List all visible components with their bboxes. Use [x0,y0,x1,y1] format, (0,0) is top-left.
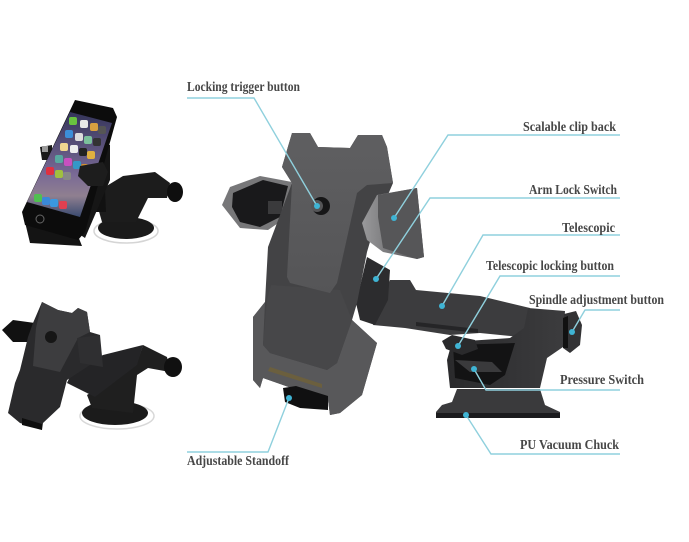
callout: Scalable clip back [391,119,620,221]
main product: telescopic arm and base [373,280,582,418]
rear holder [25,143,110,246]
locking button [442,335,478,355]
inner panel [263,285,352,370]
front clip [78,162,108,186]
silhouette [253,133,393,415]
cavity and pressure switch [453,343,515,385]
callout: Spindle adjustment button [529,292,664,335]
callout: Scalable clip back: Scalable clip back [523,119,616,134]
adjustable standoff [283,386,328,410]
screen [27,112,112,217]
callout: PU Vacuum Chuck: PU Vacuum Chuck [520,437,619,452]
callout: Adjustable Standoff [187,395,292,468]
main product: holder body [253,133,393,415]
logo mark [268,367,322,388]
callout: Telescopic [439,220,620,309]
callout: Locking trigger button [187,79,320,209]
mount base [85,172,183,243]
callout: PU Vacuum Chuck [463,412,620,454]
lower shell [253,302,377,415]
callout: Locking trigger button: Locking trigger button [187,79,300,94]
main product: left clip [222,176,292,230]
suction base [436,389,560,418]
base body [447,308,565,388]
callout: Telescopic: Telescopic [562,220,615,235]
callout: Telescopic locking button: Telescopic locking button [486,258,614,273]
product photo: phone in mount [22,100,183,246]
callout: Pressure Switch: Pressure Switch [560,372,644,387]
arm [373,280,530,338]
callout: Arm Lock Switch: Arm Lock Switch [529,182,617,197]
callout: Adjustable Standoff: Adjustable Standoff [187,453,289,468]
app icons [34,117,106,209]
trigger button [312,197,330,215]
callout: Spindle adjustment button: Spindle adjustment button [529,292,664,307]
front plate [282,133,393,293]
callout: Telescopic locking button [455,258,620,349]
spindle knob [563,311,582,353]
product photo: mount without phone [2,302,182,430]
callout: Arm Lock Switch [373,182,620,282]
main product: arm lock switch [356,257,390,325]
main product: right clip (scalable clip back) [362,188,424,259]
home button [36,215,44,223]
phone [22,100,117,240]
callout: Pressure Switch [471,366,644,390]
